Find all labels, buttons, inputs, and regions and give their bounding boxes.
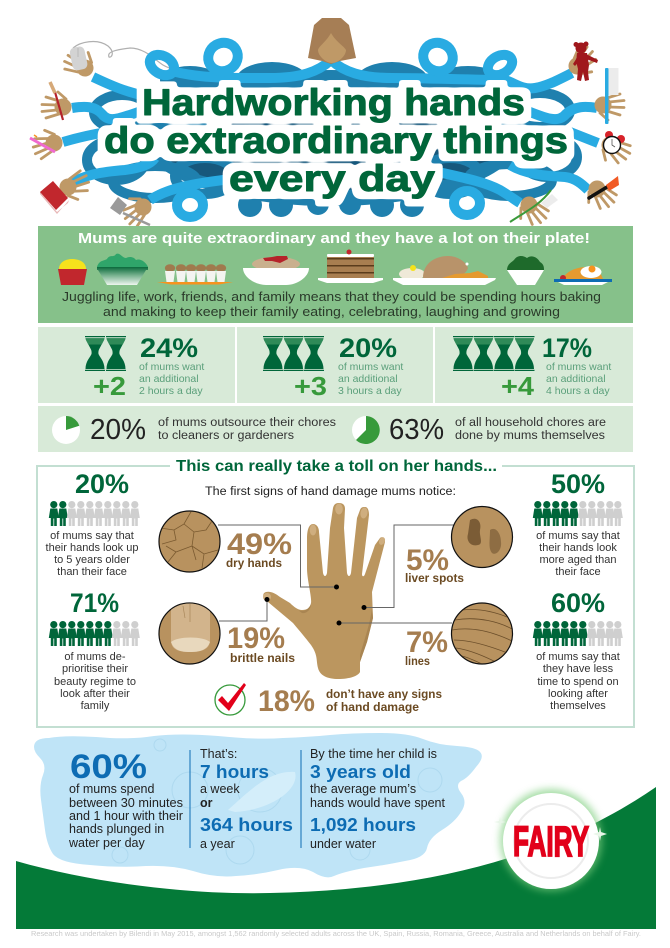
stat: 60% less time [533, 588, 623, 712]
stat: 71% de-prioritise: family [81, 700, 110, 712]
stat: 50% more aged: 50% [551, 469, 605, 499]
stat: 60% less time: time to spend on [537, 676, 619, 688]
panel: chores: to cleaners or gardeners [158, 430, 294, 442]
panel: 20% want 3 hours: of mums want [338, 361, 403, 373]
stat: 60%: hands plunged in [69, 822, 164, 836]
hand holding alarm clock [596, 131, 634, 169]
icon: muffins [157, 264, 233, 284]
panel: 17% want 4 hours: 17% [542, 333, 592, 363]
stat: 60% less time: 60% [551, 588, 605, 618]
stat: lines: 7% [406, 626, 448, 659]
section heading: This can really take a toll on her hands... [176, 458, 497, 475]
water splash [34, 733, 482, 877]
stat: 71% de-prioritise: prioritise their [62, 663, 128, 675]
panel: 17% want 4 hours: 4 hours a day [546, 385, 610, 397]
stat: lines: lines [405, 654, 430, 668]
stat: no signs: of hand damage [326, 700, 419, 714]
callout lines [218, 525, 454, 623]
stat: liver spots: liver spots [405, 571, 464, 585]
panel: plate intro [38, 226, 633, 323]
panel: 17% want 4 hours [435, 327, 633, 403]
stat: hours per week and year: a week [200, 782, 240, 796]
hand illustration [263, 503, 386, 679]
icon: check mark [215, 683, 246, 715]
panel: 20% want 3 hours: 3 hours a day [338, 385, 402, 397]
hand holding green brush [510, 190, 558, 231]
pie: 63 percent [352, 416, 380, 444]
icon: spaghetti bowl [243, 256, 309, 285]
panel body text: and making to keep their family eating, celebrating, laughing and growing [103, 304, 560, 319]
stat: no signs [258, 685, 442, 718]
stat: 60% less time: of mums say that [536, 651, 620, 663]
stat: 60%: of mums spend [69, 782, 155, 796]
stat: dry hands: dry hands [226, 556, 282, 570]
stat: 71% de-prioritise: beauty regime to [54, 676, 136, 688]
stat: 20% look older: to 5 years older [54, 554, 130, 566]
panel: 20% want 3 hours: an additional [338, 373, 398, 385]
stat: 60% less time: they have less [543, 663, 614, 675]
panel: 24% want 2 hours [38, 327, 235, 403]
stat: hours per week and year: 364 hours [200, 815, 293, 835]
stat: 20% look older: 20% [75, 469, 129, 499]
circle: brittle nails [159, 600, 220, 664]
footnote: Research was undertaken by Bilendi in May 2015, amongst 1,562 randomly selected adults across the UK, Spain, Russia, Romania, Greece, Australia and Netherlands on behalf of Fairy. [31, 929, 641, 938]
mouse cable [73, 42, 203, 76]
stat: 60% less time: themselves [550, 700, 606, 712]
icon: layer cake [318, 250, 383, 283]
hand holding toothbrush [597, 68, 624, 124]
stat: hours per week and year: or [200, 796, 213, 810]
panel: chores: of all household chores are [455, 417, 606, 429]
circle: dry hands [159, 510, 220, 572]
stat: liver spots [405, 544, 464, 585]
panel: 24% want 2 hours: an additional [139, 373, 199, 385]
stat: by 3 years old: the average mum’s [310, 782, 416, 796]
panel: 24% want 2 hours: 2 hours a day [139, 385, 203, 397]
stat: 50% more aged: more aged than [539, 554, 617, 566]
stat: brittle nails: brittle nails [230, 651, 295, 665]
icon: green salad bowl [97, 254, 148, 285]
stat: 20% look older: their hands look up [46, 542, 138, 554]
panel: chores: 63% [389, 414, 444, 446]
stat: by 3 years old: under water [310, 837, 376, 851]
stat: brittle nails [227, 622, 295, 665]
panel: 20% want 3 hours: +3 [294, 371, 327, 401]
circle: lines [452, 603, 514, 666]
stat: 60%: and 1 hour with their [69, 809, 183, 823]
title: every day [229, 158, 436, 199]
hand holding knife [582, 176, 619, 215]
hand holding teddy bear [565, 42, 602, 81]
panel: 24% want 2 hours: 24% [140, 333, 198, 363]
panel: water [34, 733, 482, 877]
stat: liver spots: 5% [406, 544, 449, 577]
icon: egg and chips plate [554, 266, 612, 285]
hand holding paintbrush [42, 82, 69, 120]
stat: 60% [68, 748, 183, 850]
stat: 60%: between 30 minutes [69, 796, 183, 810]
stat: brittle nails: 19% [227, 622, 285, 655]
stat: 71% de-prioritise: look after their [60, 688, 130, 700]
stat: by 3 years old [310, 747, 446, 851]
pie: 20 percent [52, 416, 80, 444]
stat: 20% look older: of mums say that [50, 530, 134, 542]
logo: Fairy [494, 789, 607, 891]
stat: dry hands: 49% [227, 528, 292, 561]
logo: Fairy: FAIRY [513, 819, 589, 866]
stat: 60%: water per day [68, 836, 145, 850]
panel: 17% want 4 hours: of mums want [546, 361, 611, 373]
stat: 60%: 60% [70, 748, 147, 786]
stat: 71% de-prioritise: of mums de- [64, 651, 126, 663]
panel: 17% want 4 hours: +4 [501, 371, 535, 401]
dark blue tangle [87, 62, 577, 217]
panel: chores: of mums outsource their chores [158, 417, 336, 429]
stat: 60% less time: looking after [548, 688, 608, 700]
icon: greens bowl [507, 256, 544, 285]
stat: 20% look older [46, 469, 140, 578]
stat: no signs: 18% [258, 685, 315, 718]
title: do extraordinary things [104, 120, 568, 161]
hand holding pink ruler [29, 127, 63, 160]
circle: liver spots [452, 506, 512, 568]
stat: 50% more aged: their face [555, 566, 601, 578]
stat: 50% more aged: their hands look [539, 542, 617, 554]
icon: popcorn [58, 259, 87, 285]
green hill [16, 787, 656, 929]
panel body text [62, 289, 601, 319]
panel: 17% want 4 hours: an additional [546, 373, 606, 385]
panel: chores: done by mums themselves [455, 430, 605, 442]
hand holding spatula [110, 192, 155, 229]
panel: 24% want 2 hours: +2 [93, 371, 126, 401]
stat: by 3 years old: 3 years old [310, 762, 411, 782]
hand holding mouse [61, 45, 98, 81]
stat: 50% more aged [533, 469, 623, 578]
stat: 71% de-prioritise [49, 588, 140, 712]
panel body text: Juggling life, work, friends, and family means that they could be spending hours baking [62, 289, 601, 304]
light blue arms [63, 37, 598, 217]
panel: toll on hands [37, 458, 634, 727]
stat: by 3 years old: By the time her child is [310, 747, 437, 761]
panel: 20% want 3 hours: 20% [339, 333, 397, 363]
panel: chores [38, 406, 633, 452]
panel: chores: 20% [90, 414, 146, 446]
stat: no signs: don’t have any signs [326, 687, 442, 701]
stat: hours per week and year: 7 hours [200, 762, 269, 782]
woman's head [308, 18, 356, 64]
food icons [58, 250, 612, 285]
stat: 71% de-prioritise: 71% [70, 588, 119, 618]
stat: 20% look older: than their face [57, 566, 127, 578]
title [104, 82, 568, 199]
panel: 24% want 2 hours: of mums want [139, 361, 204, 373]
stat: hours per week and year [200, 747, 293, 851]
subheading: The first signs of hand damage mums notice: [205, 486, 456, 498]
panel: 20% want 3 hours [237, 327, 433, 403]
header illustration: woman with many arms [29, 18, 634, 231]
stat: by 3 years old: 1,092 hours [310, 815, 416, 835]
stat: by 3 years old: hands would have spent [310, 796, 446, 810]
title: Hardworking hands [142, 82, 525, 123]
stat: 50% more aged: of mums say that [536, 530, 620, 542]
icon: roast chicken dinner [393, 256, 496, 285]
hand holding red book [40, 169, 93, 214]
panel heading: Mums are quite extraordinary and they have a lot on their plate! [78, 230, 590, 247]
stat: hours per week and year: a year [200, 837, 235, 851]
stat: hours per week and year: That’s: [200, 747, 237, 761]
